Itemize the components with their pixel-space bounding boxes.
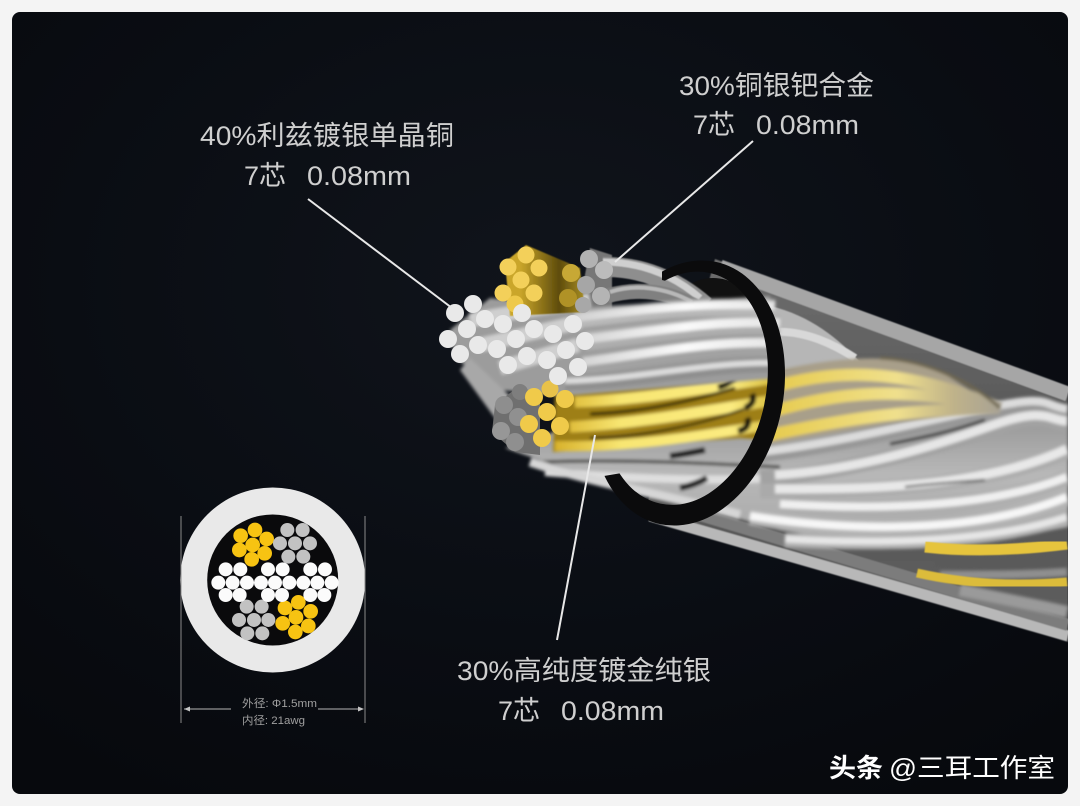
- label: 30% alloy: 7芯: [693, 110, 735, 140]
- label: 40% litz: 7芯: [244, 161, 286, 191]
- white strands: [450, 296, 780, 425]
- leader line: litz copper: [308, 199, 452, 308]
- gold lower strands: [917, 544, 1067, 584]
- gold top bundle: [494, 245, 585, 316]
- cross-section diagram: [180, 488, 365, 727]
- label: 30% gold plated: 7芯: [498, 696, 540, 726]
- grey strands rear top: [578, 248, 860, 372]
- gold lower bundle: [520, 380, 574, 447]
- label: 40% litz: 0.08mm: [307, 161, 411, 191]
- leader line: gold plated silver: [557, 435, 595, 640]
- grey lower bundle: [492, 384, 540, 455]
- cable jacket: [645, 259, 1068, 642]
- cable illustration: [439, 245, 1068, 642]
- watermark: 头条: [829, 753, 883, 783]
- watermark: [829, 753, 1055, 783]
- label: 30% alloy: 0.08mm: [756, 110, 859, 140]
- silver strand mass: [505, 400, 1068, 612]
- grey top bundle: [575, 250, 613, 313]
- label: 30% alloy: [679, 71, 874, 140]
- label: 30% alloy: 30%铜银钯合金: [679, 71, 874, 101]
- label: 30% gold plated: 30%高纯度镀金纯银: [457, 656, 711, 686]
- white end bundle: [439, 295, 594, 385]
- label: 40% litz: 40%利兹镀银单晶铜: [200, 121, 454, 151]
- label: 40% litz: [200, 121, 454, 191]
- ring back shadow: [696, 278, 748, 301]
- gold strands: [553, 358, 1002, 452]
- leader line: copper silver palladium: [615, 141, 753, 262]
- cross-section diagram: 外径: Φ1.5mm: [242, 697, 317, 710]
- watermark: @三耳工作室: [889, 753, 1055, 783]
- label: 30% gold plated: 0.08mm: [561, 696, 664, 726]
- label: 30% gold plated: [457, 656, 711, 726]
- black ring: [604, 260, 785, 526]
- cross-section diagram: 内径: 21awg: [242, 713, 305, 727]
